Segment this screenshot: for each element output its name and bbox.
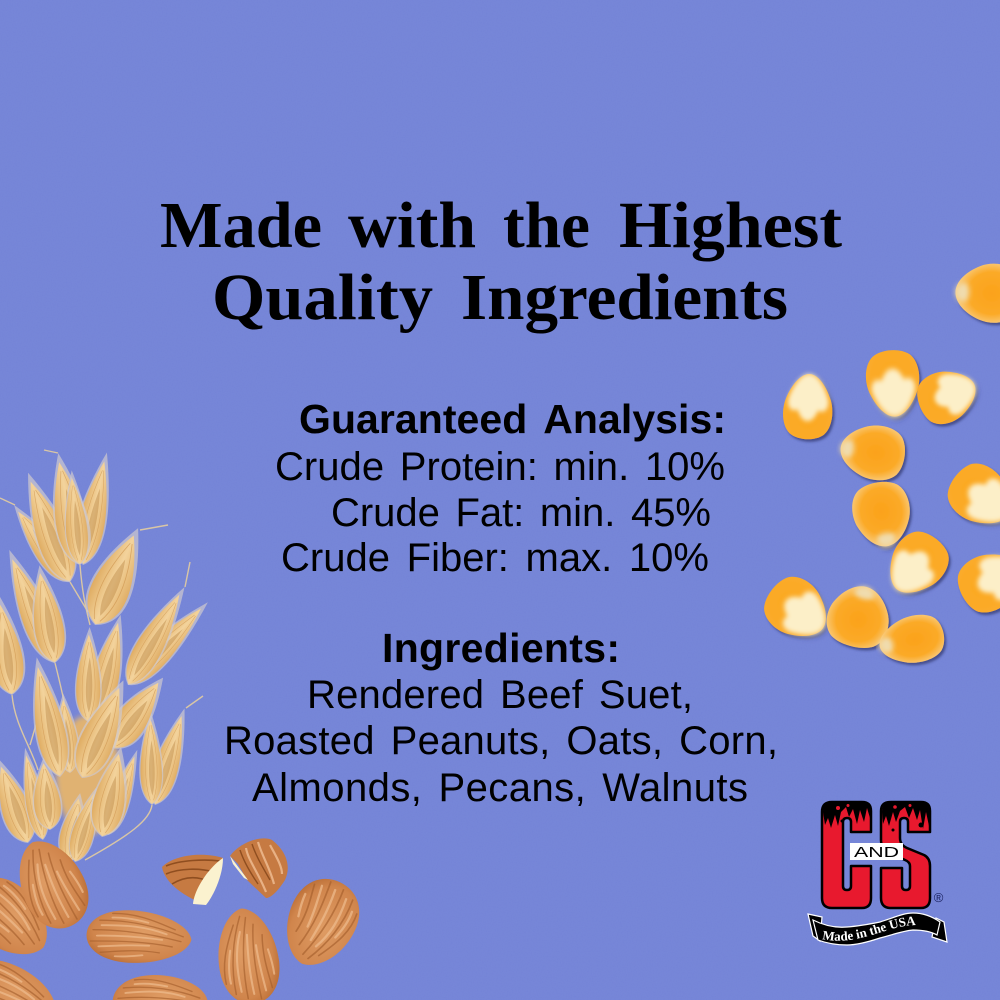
title [160, 189, 842, 334]
text block: guaranteed analysis: Guaranteed Analysis: [299, 396, 726, 442]
registered mark: ® [934, 890, 944, 905]
oat cluster shading [56, 715, 120, 835]
logo: C and S [807, 800, 948, 946]
broken almond: right half [230, 838, 288, 898]
illustration: almonds [0, 829, 371, 1000]
flames [823, 802, 929, 832]
text block: ingredients [224, 625, 778, 810]
text block: ingredients: Almonds, Pecans, Walnuts [252, 766, 748, 810]
oat spikelets [0, 449, 217, 865]
illustration: corn kernels [755, 262, 1000, 670]
oat stems [0, 450, 203, 860]
banner: Made in the USA: Made in the USA [822, 916, 916, 941]
text block: ingredients: Rendered Beef Suet, [307, 673, 693, 717]
broken almond: left half [162, 855, 223, 905]
text block: guaranteed analysis: Crude Fat: min. 45% [331, 491, 711, 535]
AND box: AND [854, 844, 899, 861]
text block: guaranteed analysis [275, 396, 726, 580]
text block: guaranteed analysis: Crude Protein: min. 10% [275, 445, 725, 489]
letters C and S [822, 802, 930, 908]
illustration: oat sprig [0, 449, 217, 865]
text block: guaranteed analysis: Crude Fiber: max. 10% [281, 536, 709, 580]
title: Made [160, 189, 322, 262]
title: with [348, 189, 476, 262]
title: Highest [619, 189, 842, 262]
banner: Made in the USA [807, 912, 948, 946]
title: the [503, 189, 590, 262]
AND box [850, 843, 903, 861]
text block: ingredients: Roasted Peanuts, Oats, Corn, [224, 719, 778, 763]
title: Quality [212, 261, 433, 334]
text block: ingredients: Ingredients: [382, 625, 620, 671]
title: Ingredients [461, 261, 788, 334]
